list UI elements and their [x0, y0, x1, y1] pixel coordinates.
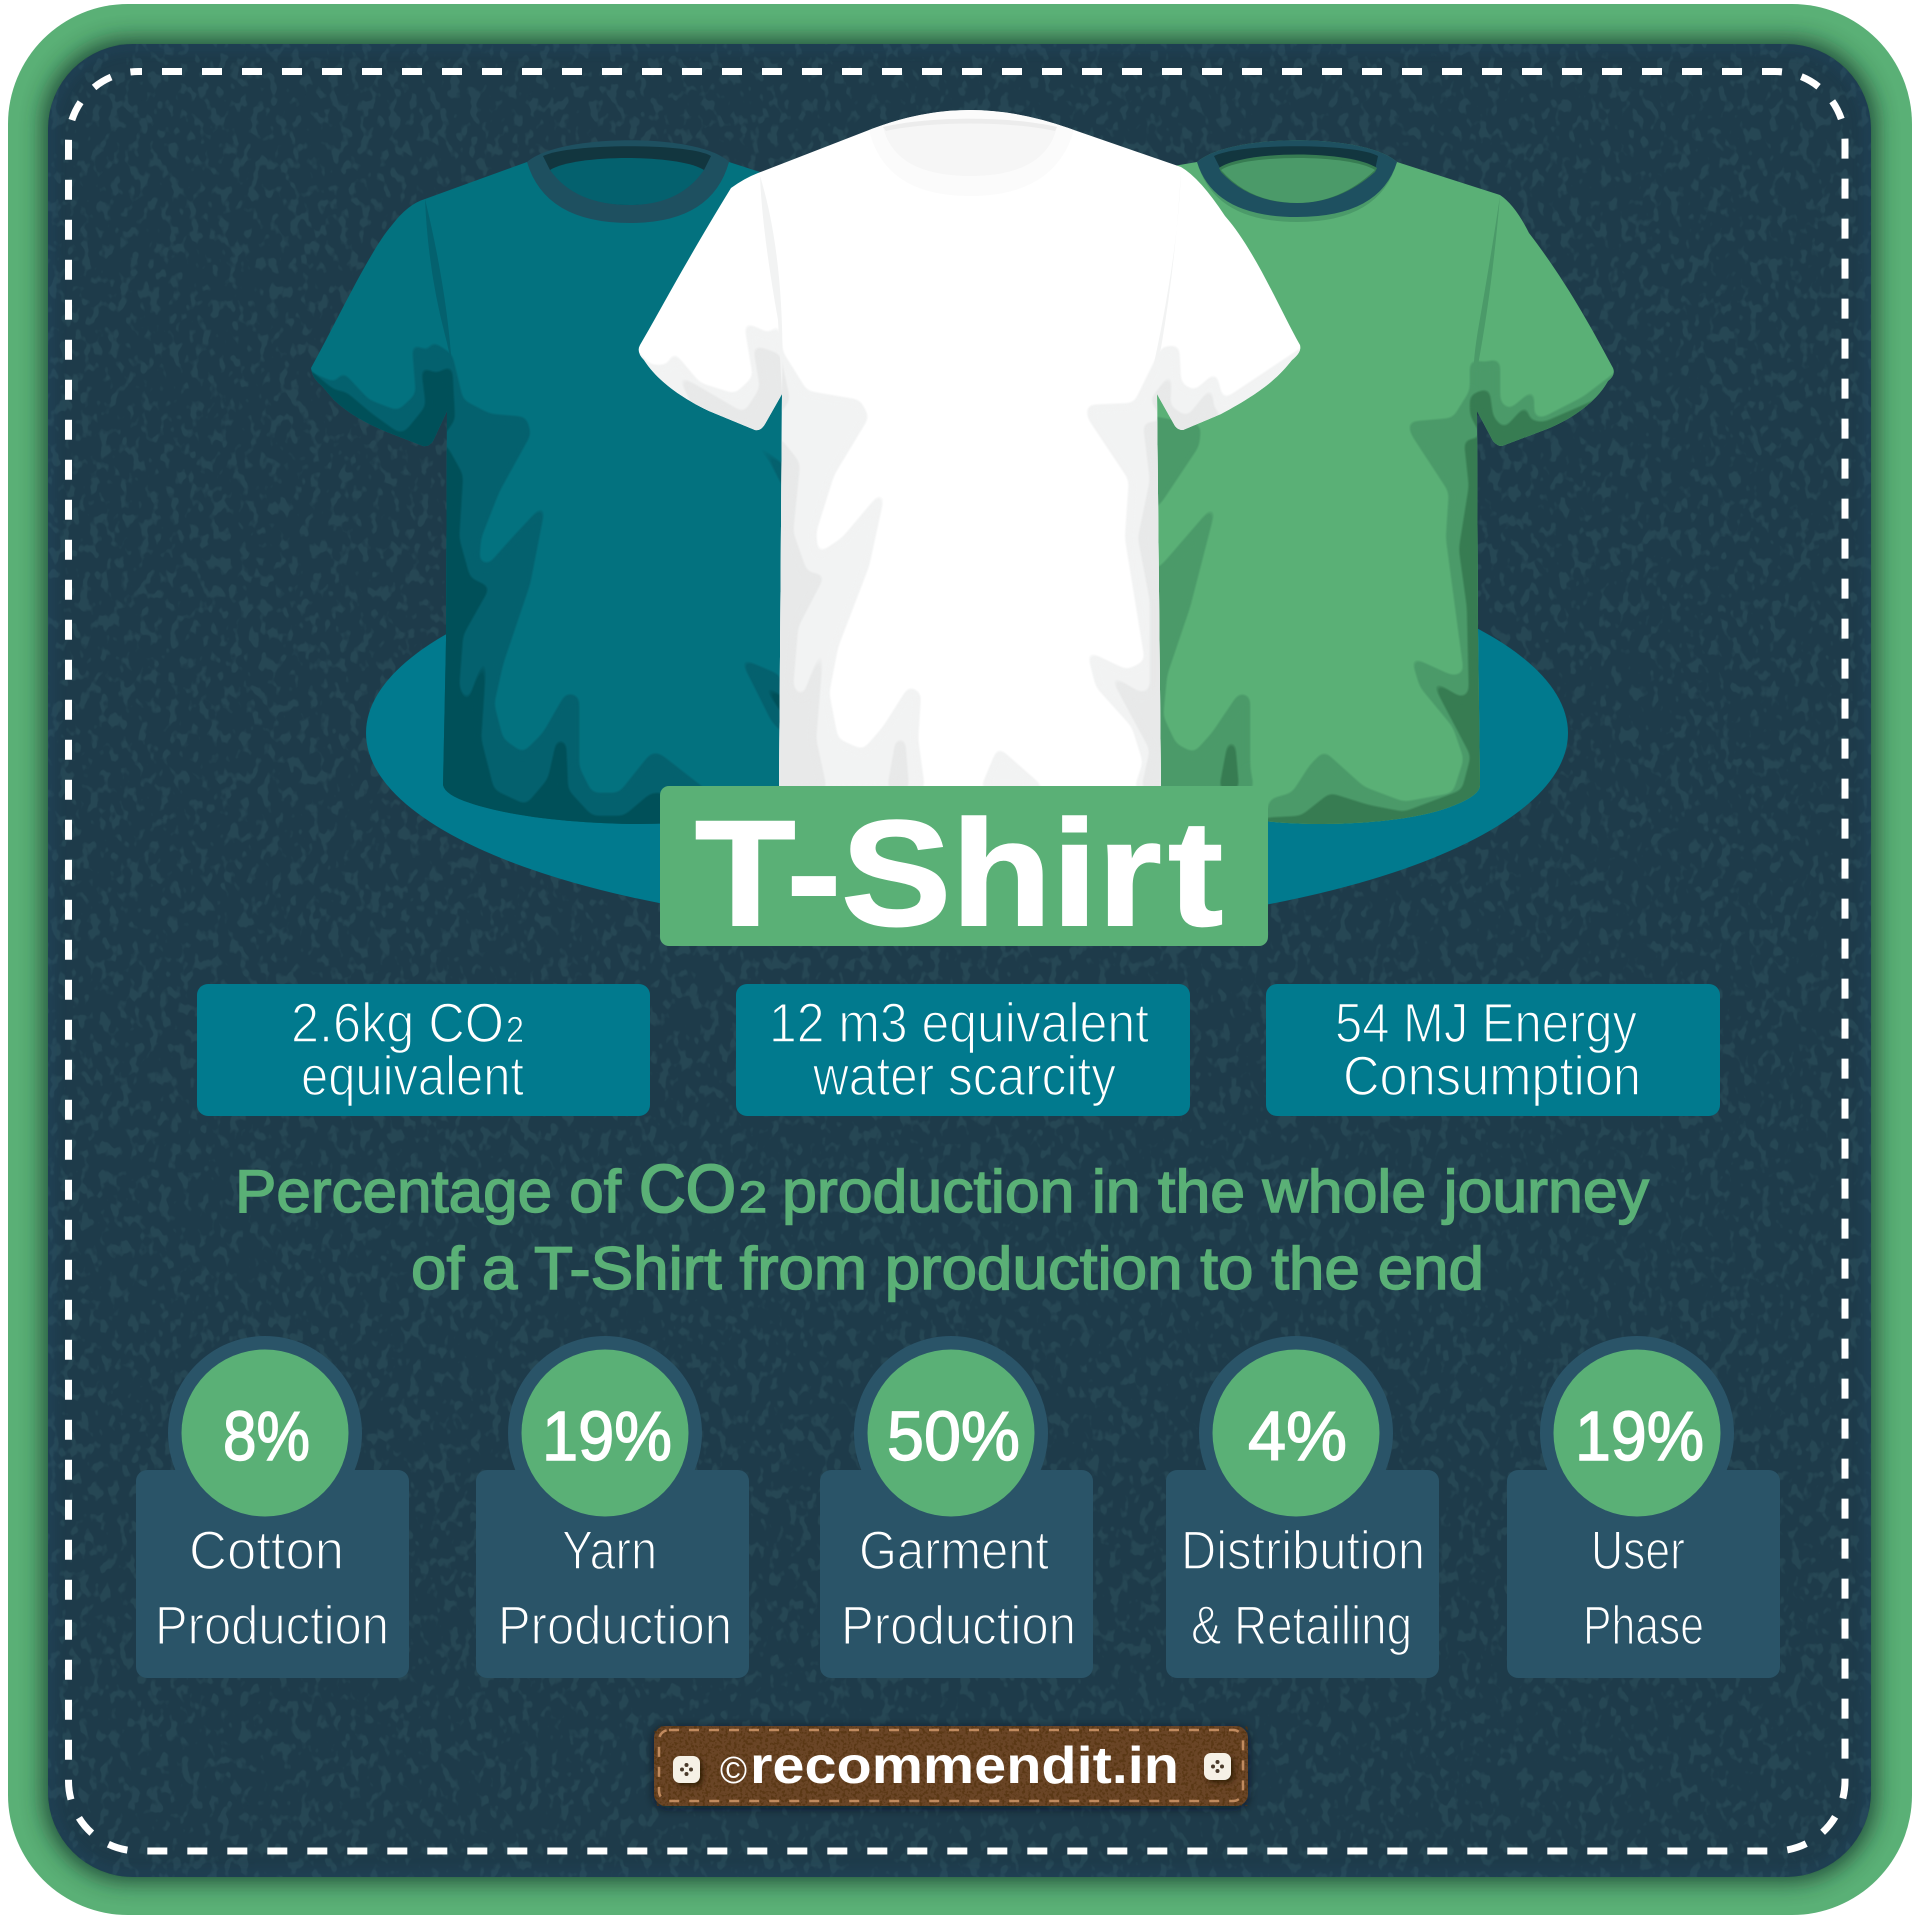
card: distribution and retailing: & Retailing: [1191, 1594, 1412, 1656]
white t-shirt: [620, 100, 1320, 800]
heading: CO: [639, 1151, 736, 1227]
stat box: water: water scarcity: [812, 1044, 1116, 1107]
stat box: energy: [1266, 984, 1720, 1116]
card: cotton production: Production: [155, 1594, 389, 1656]
card: user phase: [1507, 1336, 1780, 1678]
white collar: [870, 110, 1074, 176]
card: garment production: [820, 1336, 1093, 1678]
card: user phase: Phase: [1583, 1594, 1704, 1656]
leather badge: ©: [720, 1750, 747, 1792]
stat box: CO2: equivalent: [301, 1044, 524, 1107]
teal collar: [527, 140, 729, 223]
stat box: CO2: 2.6kg CO: [291, 991, 504, 1054]
card: cotton production: 8%: [223, 1397, 310, 1475]
teal ellipse platform: [366, 535, 1568, 931]
heading: 2: [739, 1173, 767, 1222]
stat box: energy: 54 MJ Energy: [1335, 991, 1637, 1054]
icon: left button: [673, 1756, 700, 1783]
heading: Percentage of: [235, 1158, 621, 1225]
leather badge: [654, 1726, 1248, 1806]
card: yarn production: Production: [498, 1594, 732, 1656]
card: yarn production: Yarn: [562, 1519, 657, 1581]
card: cotton production: Cotton: [189, 1519, 344, 1581]
card: garment production: Garment: [859, 1519, 1049, 1581]
heading: of a T-Shirt from production to the end: [411, 1235, 1484, 1302]
stat box: water: 12 m3 equivalent: [769, 991, 1149, 1054]
card: garment production: Production: [841, 1594, 1076, 1656]
teal t-shirt: [311, 140, 782, 824]
card: yarn production: [476, 1336, 749, 1678]
card: yarn production: 19%: [542, 1397, 672, 1475]
card: distribution and retailing: 4%: [1248, 1397, 1347, 1475]
heading: [235, 1151, 1649, 1302]
stat box: energy: Consumption: [1343, 1044, 1641, 1107]
title label: T-Shir t: [695, 789, 1223, 957]
leather badge: recommendit.in: [750, 1737, 1179, 1795]
green t-shirt: [1157, 140, 1614, 824]
heading: production in the whole journey: [782, 1158, 1649, 1225]
card: distribution and retailing: Distribution: [1181, 1519, 1425, 1581]
t-shirts group: [290, 100, 1630, 840]
stat box: water: [736, 984, 1190, 1116]
card: user phase: User: [1591, 1519, 1685, 1581]
green collar: [1197, 140, 1397, 222]
stat box: CO2: [197, 984, 650, 1116]
card: distribution and retailing: [1166, 1336, 1439, 1678]
icon: right button: [1204, 1753, 1231, 1780]
stat box: CO2: 2: [506, 1009, 524, 1050]
card: user phase: 19%: [1575, 1397, 1704, 1475]
card: garment production: 50%: [887, 1397, 1020, 1475]
card: cotton production: [136, 1336, 409, 1678]
